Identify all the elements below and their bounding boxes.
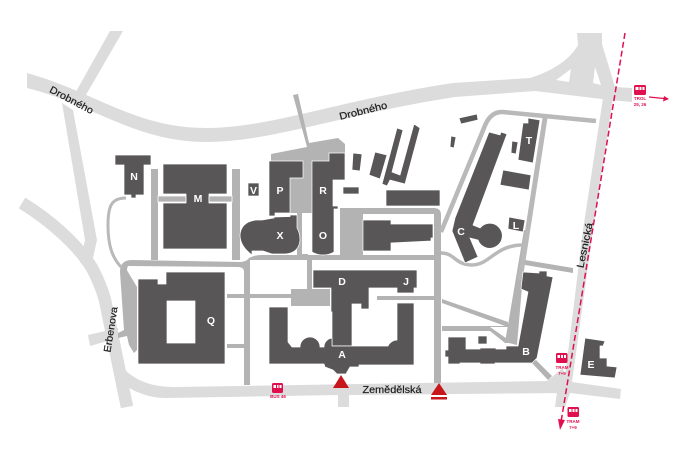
building X xyxy=(240,215,300,255)
letter E: E xyxy=(587,359,595,371)
plaza north xyxy=(271,94,345,260)
street label Drobného west: Drobného xyxy=(47,85,95,117)
icon: trolleybus stop: 25, 26 xyxy=(634,102,647,107)
street label Drobného east: Drobného xyxy=(338,100,389,123)
U-shaped building xyxy=(382,124,420,186)
letter R: R xyxy=(319,185,327,197)
northwest branch xyxy=(73,31,123,100)
long block xyxy=(386,190,440,206)
street Drobného xyxy=(27,33,632,142)
icon: bus stop: BUS 46 xyxy=(270,394,286,399)
buildings xyxy=(115,114,617,378)
path loop xyxy=(118,208,441,385)
tilted block xyxy=(352,153,362,171)
building N xyxy=(115,155,151,198)
small block xyxy=(450,136,456,148)
letter L: L xyxy=(513,220,520,232)
icon: tram stop south: 7+9 xyxy=(569,425,577,430)
letter J: J xyxy=(403,276,409,288)
letter X: X xyxy=(276,230,284,242)
letter B: B xyxy=(522,346,530,358)
small square xyxy=(478,336,487,344)
letter V: V xyxy=(250,185,257,197)
street Zemědělská xyxy=(123,368,570,407)
letter P: P xyxy=(276,185,284,197)
icon: trolleybus stop: TROL xyxy=(634,96,646,101)
letter D: D xyxy=(338,276,346,288)
letter O: O xyxy=(319,230,327,242)
entrance marker with bar xyxy=(431,383,447,400)
building V xyxy=(248,183,259,196)
icon: bus stop xyxy=(270,383,286,399)
letter M: M xyxy=(194,193,203,205)
building T xyxy=(518,118,540,163)
building M xyxy=(163,164,227,249)
letter T: T xyxy=(526,135,533,147)
letter C: C xyxy=(457,226,465,238)
street label Erbenova: Erbenova xyxy=(103,306,121,353)
street Erbenova xyxy=(22,203,127,407)
icon: tram stop north: 7+9 xyxy=(558,371,566,376)
building Q xyxy=(138,272,225,364)
entrance marker A xyxy=(333,375,349,388)
block near T xyxy=(500,170,531,190)
letter Q: Q xyxy=(207,315,215,327)
building P xyxy=(269,161,303,216)
white traffic islands xyxy=(556,67,601,85)
small block xyxy=(343,187,359,194)
building B xyxy=(445,271,553,364)
thin paths xyxy=(108,112,596,280)
tilted block xyxy=(369,152,387,179)
street Lesnická xyxy=(547,98,621,407)
letter N: N xyxy=(130,171,138,183)
arrow: trolleybus direction xyxy=(649,96,669,102)
street label Lesnická: Lesnická xyxy=(575,221,596,269)
letter A: A xyxy=(338,349,346,361)
building D and J xyxy=(313,270,417,346)
building L xyxy=(508,217,525,232)
dashed tram line xyxy=(558,33,625,430)
east walkways xyxy=(442,299,513,343)
small block xyxy=(459,114,478,124)
building letters xyxy=(130,135,595,371)
building C xyxy=(452,132,507,263)
icon: tram stop north xyxy=(556,353,569,376)
campus paths xyxy=(118,94,573,385)
building R and O xyxy=(312,153,345,255)
connecting walkways xyxy=(227,258,434,348)
icon: trolleybus stop xyxy=(634,85,647,107)
building E xyxy=(580,338,617,378)
icon: tram stop north: TRAM xyxy=(556,365,569,370)
icon: tram stop south xyxy=(566,407,580,430)
street names xyxy=(47,85,596,396)
icon: tram stop south: TRAM xyxy=(566,419,580,424)
building A xyxy=(269,303,414,374)
M columns xyxy=(151,169,240,260)
gap between paths xyxy=(302,213,308,254)
small block xyxy=(511,141,518,154)
building south of long block xyxy=(363,220,433,251)
Erbenova side branch xyxy=(88,328,118,346)
streets xyxy=(22,31,632,407)
north-south connector xyxy=(62,103,97,275)
M connectors xyxy=(158,196,232,202)
street label Zemědělská: Zemědělská xyxy=(362,385,422,396)
